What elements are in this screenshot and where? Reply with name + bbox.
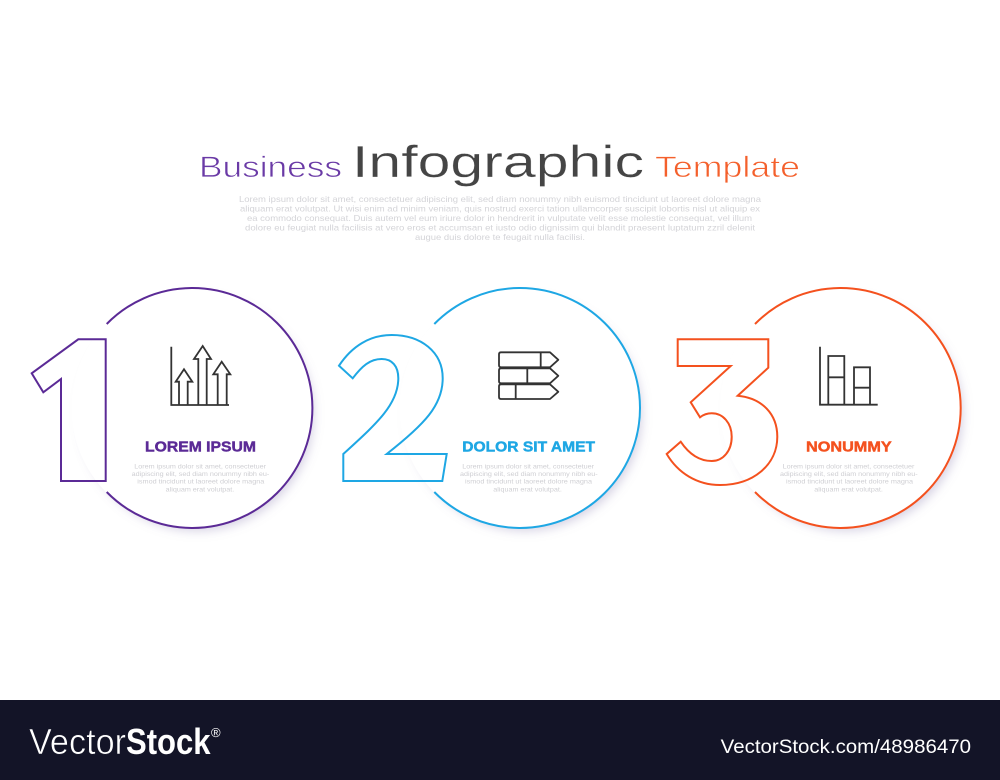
numeral 2 (339, 335, 447, 481)
circle fill (720, 288, 960, 528)
circle fill (72, 288, 312, 528)
icon: arrows chart (171, 346, 230, 405)
circle arc (755, 288, 961, 528)
title: Template (655, 151, 800, 184)
intro text block: aliquam erat volutpat. Ut wisi enim ad minim veniam, quis nostrud exerci tation ullamcorper suscipit lobortis nisl ut aliquip ex (240, 204, 761, 214)
text block: aliquam erat volutpat. (493, 486, 562, 493)
heading: dolor sit amet: DOLOR SIT AMET (462, 440, 595, 456)
text block: ismod tincidunt ut laoreet dolore magna (137, 479, 265, 486)
watermark logo (29, 721, 221, 762)
panel: step 2 (339, 288, 642, 531)
heading: lorem ipsum: LOREM IPSUM (145, 440, 256, 456)
text block: ismod tincidunt ut laoreet dolore magna (465, 479, 593, 486)
title (199, 138, 800, 187)
circle shadow (80, 297, 314, 531)
circle shadow (408, 297, 642, 531)
text block: Lorem ipsum dolor sit amet, consectetuer (462, 464, 595, 470)
text block: adipiscing elit, sed diam nonummy nibh eu- (460, 471, 598, 478)
text block: adipiscing elit, sed diam nonummy nibh eu- (780, 471, 918, 478)
text block: aliquam erat volutpat. (166, 486, 235, 493)
circle arc (434, 288, 640, 528)
circle shadow (729, 297, 963, 531)
text block: ismod tincidunt ut laoreet dolore magna (786, 479, 914, 486)
text block (132, 464, 269, 493)
panel: step 3 (667, 288, 963, 531)
circle arc (107, 288, 312, 528)
watermark logo: Stock (126, 721, 211, 762)
text block: Lorem ipsum dolor sit amet, consectetuer (134, 464, 267, 470)
watermark logo: ® (211, 725, 221, 740)
text block: aliquam erat volutpat. (814, 486, 883, 493)
numeral 3 (667, 339, 777, 485)
watermark logo: Vector (29, 721, 126, 762)
intro text block: ea commodo consequat. Duis autem vel eum iriure dolor in hendrerit in vulputate velit esse molestie consequat, vel illum (247, 213, 752, 223)
footer bar (0, 700, 1000, 780)
text block (460, 464, 598, 493)
heading: nonummy: NONUMMY (806, 440, 892, 456)
panel: step 1 (32, 288, 314, 531)
circle fill (400, 288, 640, 528)
intro text block: dolore eu feugiat nulla facilisis at vero eros et accumsan et iusto odio dignissim qui blandit praesent luptatum zzril delenit (245, 222, 756, 232)
icon: bar chart (820, 347, 878, 405)
text block: Lorem ipsum dolor sit amet, consectetuer (783, 464, 915, 470)
intro text block (239, 194, 761, 242)
title: Business (199, 151, 342, 184)
icon: stacked pencil bars (499, 352, 558, 399)
text block: adipiscing elit, sed diam nonummy nibh eu- (132, 471, 269, 478)
intro text block: augue duis dolore te feugait nulla facilisi. (415, 232, 585, 242)
image id: VectorStock.com/48986470 (721, 736, 971, 758)
intro text block: Lorem ipsum dolor sit amet, consectetuer adipiscing elit, sed diam nonummy nibh euismod tincidunt ut laoreet dolore magna (239, 194, 761, 204)
numeral 1 (32, 339, 106, 481)
title: Infographic (352, 138, 644, 187)
text block (780, 464, 918, 493)
